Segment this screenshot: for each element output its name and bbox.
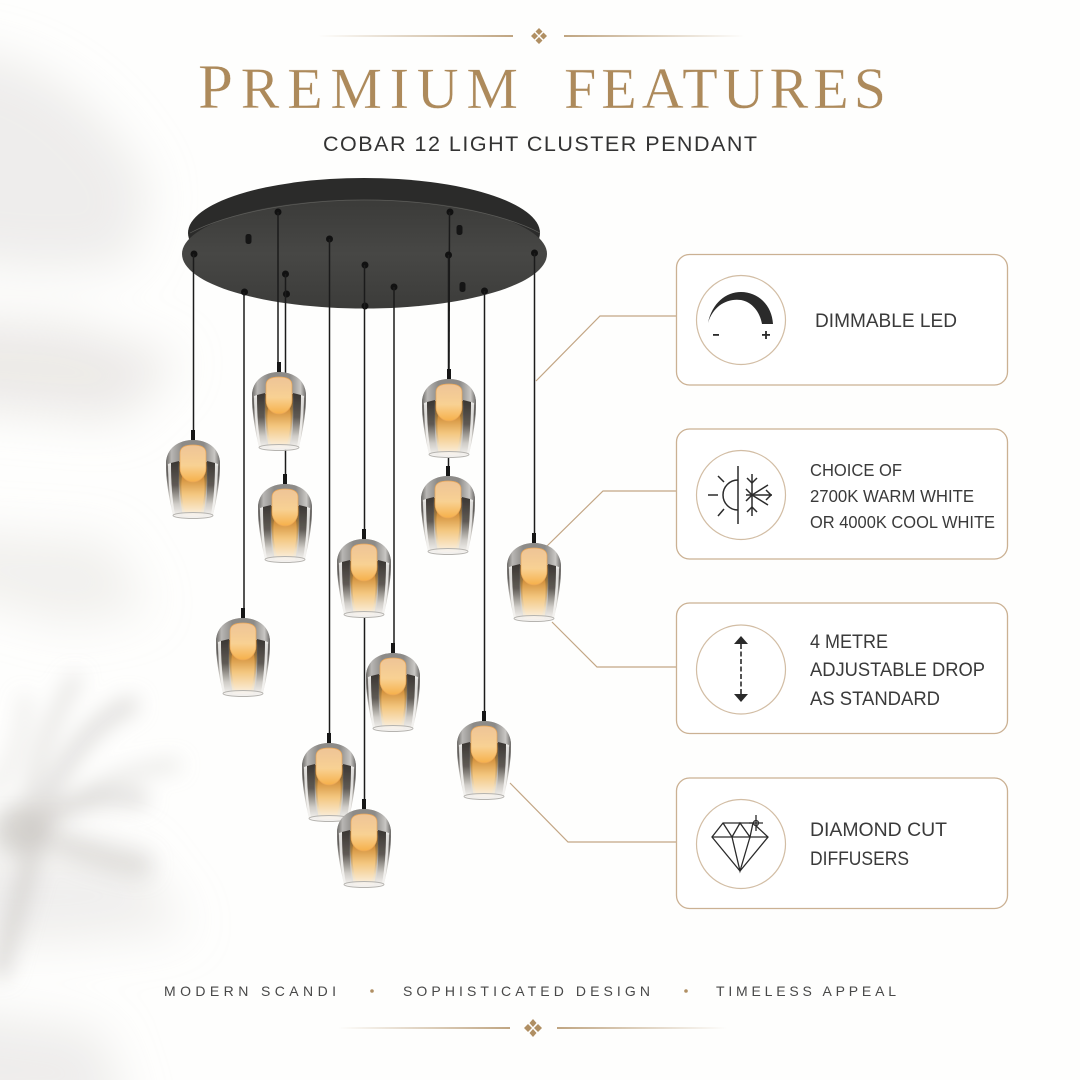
text: adjustable drop: ADJUSTABLE DROP <box>810 660 985 681</box>
pendant light 11 <box>457 711 511 800</box>
text: diamond cut <box>810 820 947 870</box>
top ornament divider <box>318 28 745 44</box>
text: dimmable LED: DIMMABLE LED <box>815 311 957 332</box>
title: FEATURES <box>564 56 886 121</box>
text: adjustable drop: 4 METRE <box>810 632 888 653</box>
panel: adjustable drop <box>676 603 1008 734</box>
text: diamond cut: DIAMOND CUT <box>810 820 947 841</box>
text: colour temperature: OR 4000K COOL WHITE <box>810 512 995 532</box>
text: diamond cut: DIFFUSERS <box>810 849 909 870</box>
text: colour temperature <box>810 460 995 532</box>
footer tagline: SOPHISTICATED DESIGN <box>403 983 650 999</box>
pendant light 3 <box>258 474 312 562</box>
canopy mounting knobs <box>246 225 466 292</box>
pendant light 1 <box>166 430 220 518</box>
pendant light 9 <box>366 643 420 732</box>
panel: colour temperature <box>676 429 1008 559</box>
connector lines <box>510 316 676 842</box>
text: adjustable drop: AS STANDARD <box>810 689 940 710</box>
footer tagline: TIMELESS APPEAL <box>716 983 896 999</box>
pendant light 8 <box>216 608 270 696</box>
pendant light 4 <box>422 369 476 458</box>
background leaf shadows <box>0 50 190 1080</box>
pendant light 6 <box>507 533 561 622</box>
text: colour temperature: 2700K WARM WHITE <box>810 486 974 506</box>
icon: dimmer dial <box>708 292 773 339</box>
icon: double arrow <box>734 636 748 702</box>
pendant light 2 <box>252 362 306 450</box>
pendant cords <box>190 208 538 809</box>
pendant light 12 <box>337 799 391 888</box>
pendant light 7 <box>337 529 391 618</box>
text: adjustable drop <box>810 632 985 710</box>
bottom ornament divider <box>338 1019 727 1037</box>
icon: sun and snowflake <box>708 466 772 524</box>
footer tagline <box>164 983 896 999</box>
footer tagline: MODERN SCANDI <box>164 983 336 999</box>
title <box>198 52 886 122</box>
title: PREMIUM <box>198 52 518 122</box>
icon: diamond <box>712 815 768 871</box>
subtitle: COBAR 12 LIGHT CLUSTER PENDANT <box>323 132 757 156</box>
pendant light 5 <box>421 466 475 554</box>
ceiling canopy <box>182 178 547 308</box>
pendant light 10 <box>302 733 356 822</box>
panel: diamond cut <box>676 778 1008 908</box>
text: colour temperature: CHOICE OF <box>810 460 902 480</box>
panel: dimmable LED <box>676 254 1008 385</box>
